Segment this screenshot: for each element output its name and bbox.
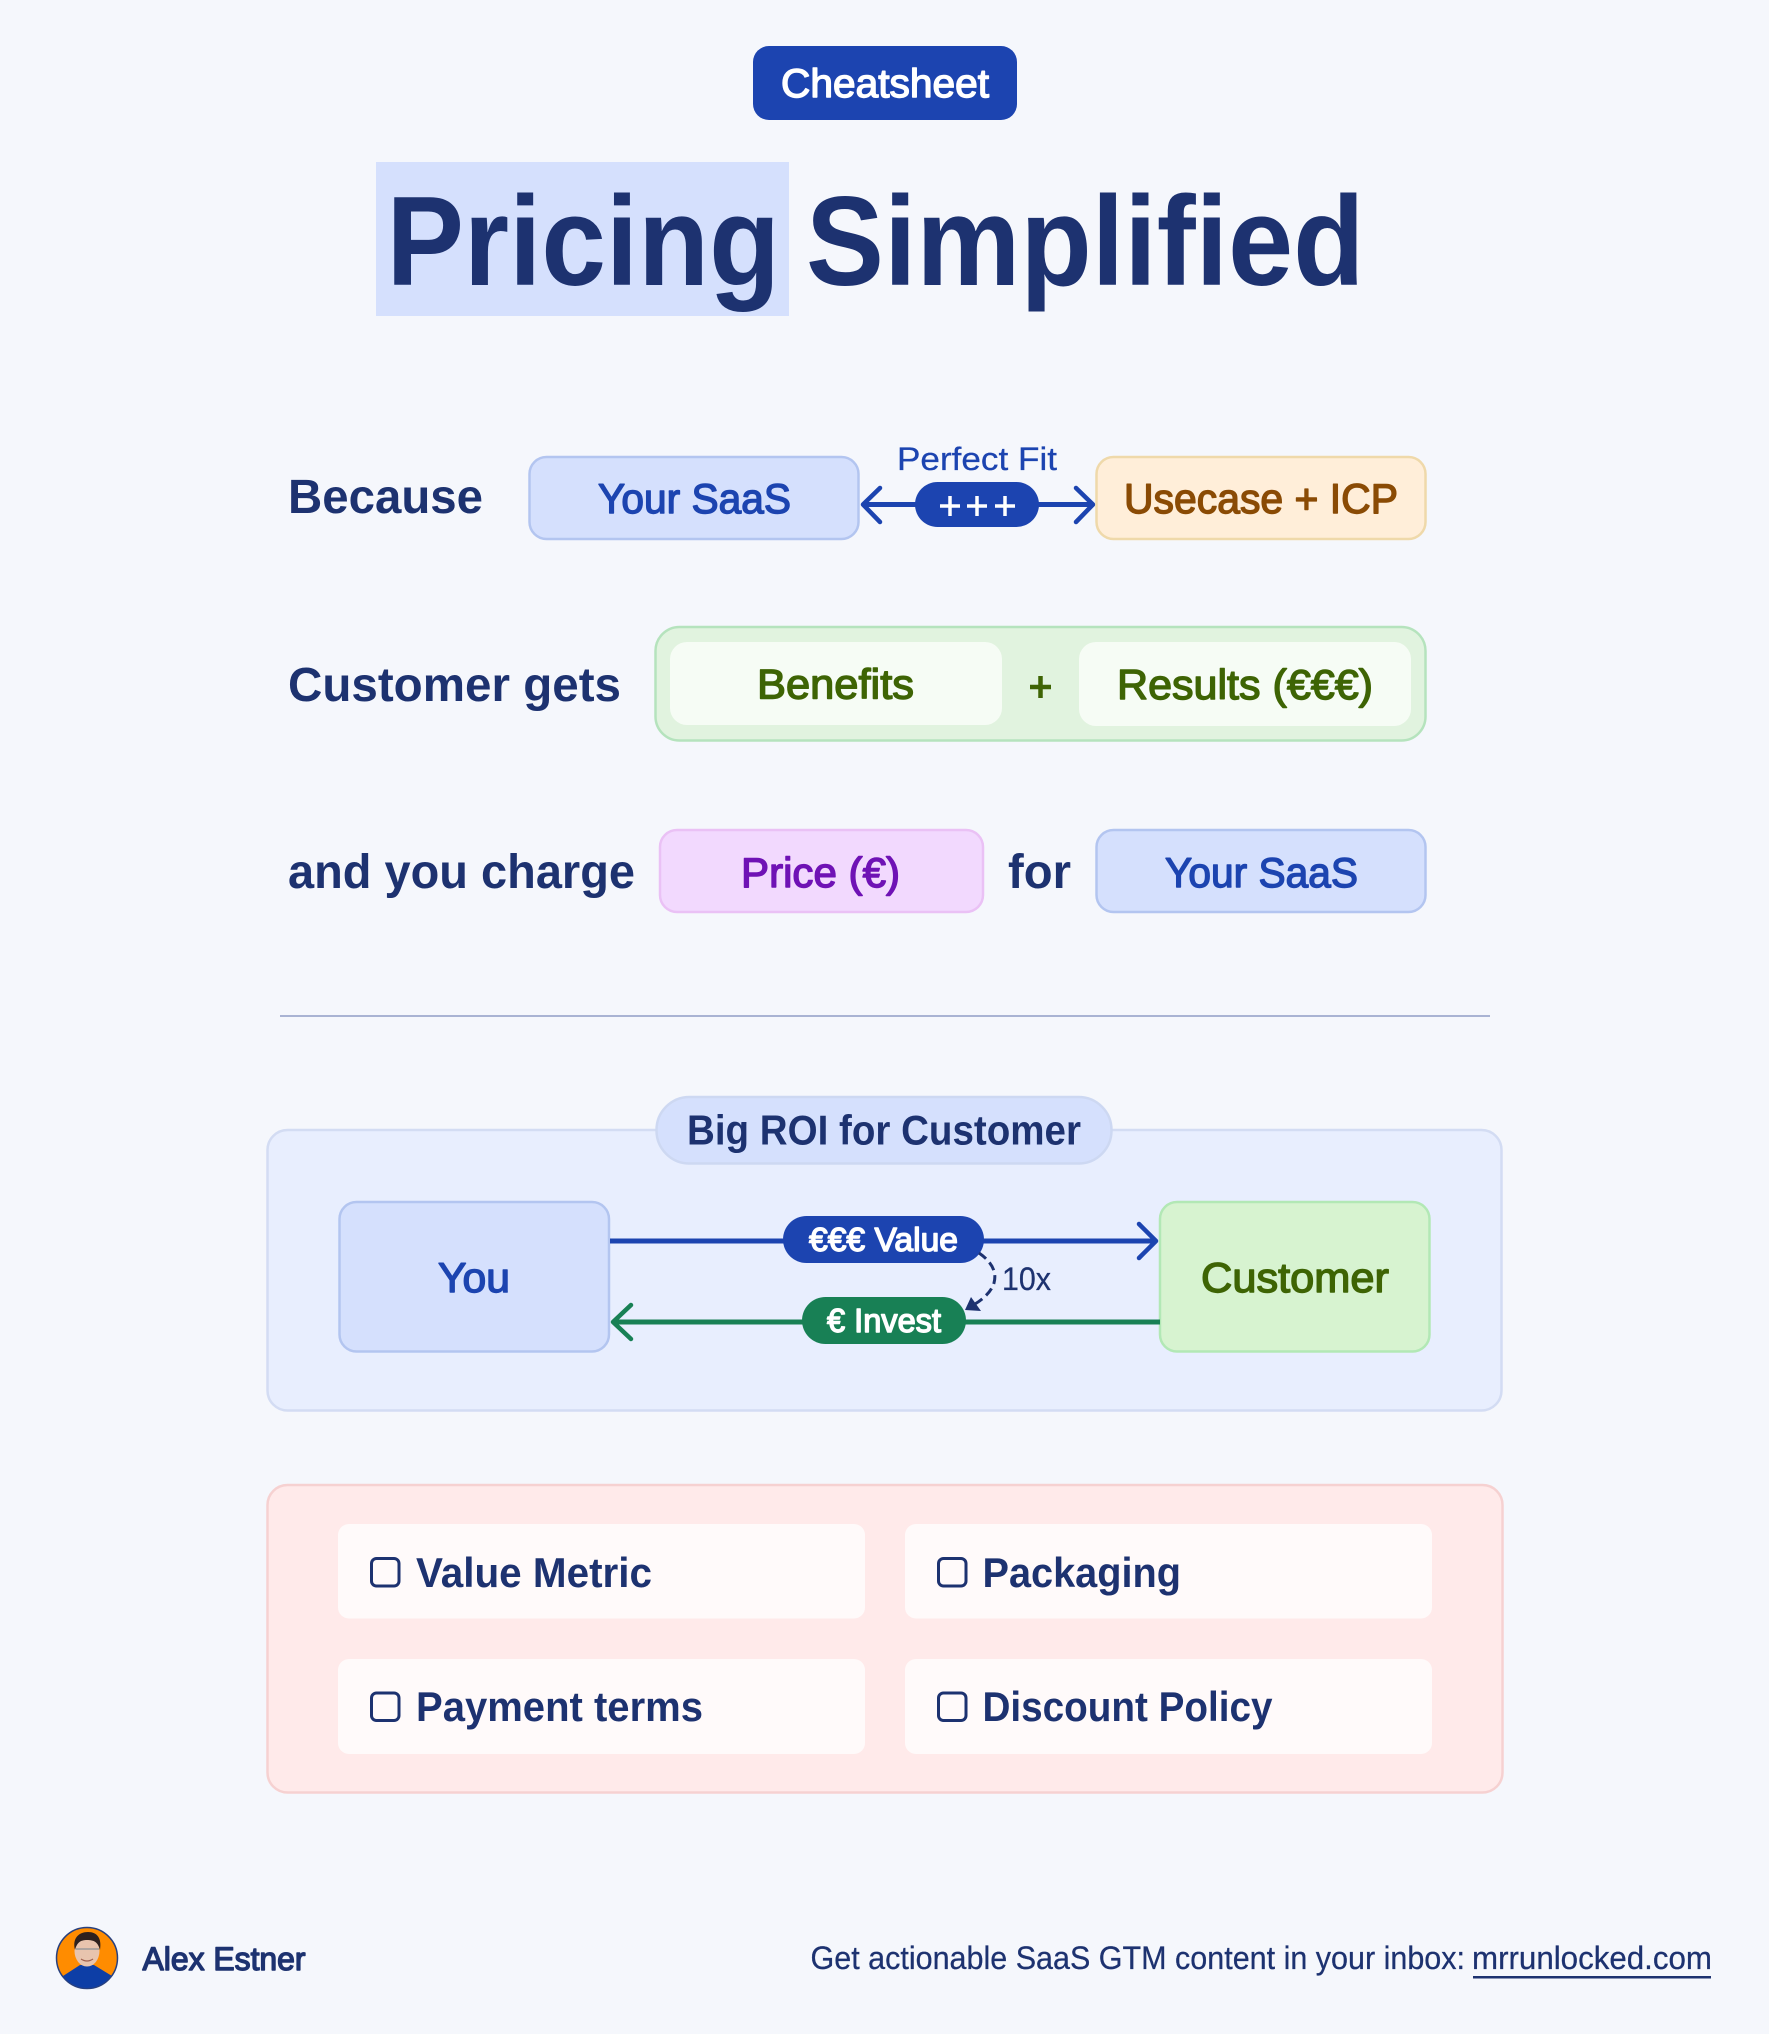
box: Your SaaS — [1096, 830, 1426, 912]
box: Price: Price (€) — [741, 849, 900, 896]
panel: checklist — [268, 1485, 1502, 1792]
item: Packaging: Packaging — [982, 1549, 1181, 1596]
panel: benefits and results: Results (€€€) — [1117, 661, 1373, 708]
arrow: value to customer — [610, 1216, 1156, 1263]
row: Customer gets — [288, 627, 1426, 740]
title: Pricing Simplified: Simplified — [806, 170, 1364, 312]
item: Value Metric: Value Metric — [416, 1549, 652, 1596]
box: Price — [660, 830, 983, 912]
item: Value Metric — [338, 1524, 865, 1618]
arrow: 10x dashed: 10x — [1002, 1261, 1051, 1297]
label: Because: Because — [288, 471, 483, 524]
box: You: You — [438, 1254, 510, 1301]
badge: Cheatsheet — [753, 46, 1017, 120]
box: Usecase + ICP — [1096, 457, 1426, 539]
title: Pricing Simplified — [376, 162, 1364, 316]
arrow: invest to you: € Invest — [827, 1302, 941, 1339]
icon: avatar — [56, 1928, 118, 1995]
footer: author — [56, 1928, 306, 1995]
title: Pricing Simplified: Pricing — [386, 170, 780, 312]
footer: call to action: Get actionable SaaS GTM content in your inbox: — [810, 1940, 1465, 1976]
panel: benefits and results: Benefits — [757, 660, 914, 708]
panel: benefits and results — [656, 627, 1426, 740]
item: Payment terms: Payment terms — [416, 1683, 703, 1730]
heading pill: Big ROI for Customer: Big ROI for Customer — [687, 1106, 1081, 1154]
arrow: value to customer: €€€ Value — [809, 1221, 958, 1258]
panel: Big ROI for Customer — [268, 1097, 1502, 1410]
arrow: Perfect Fit double arrow: Perfect Fit — [897, 441, 1057, 477]
footer: call to action: mrrunlocked.com — [1472, 1940, 1712, 1976]
box: Your SaaS: Your SaaS — [1165, 849, 1358, 896]
box: Customer: Customer — [1201, 1254, 1389, 1301]
arrow: 10x dashed — [965, 1253, 1051, 1311]
author name: Alex Estner — [142, 1941, 306, 1977]
row: Because — [288, 441, 1426, 539]
heading pill: Big ROI for Customer — [656, 1097, 1112, 1164]
box: Your SaaS — [530, 457, 858, 539]
box: Your SaaS: Your SaaS — [598, 475, 791, 522]
box: Usecase + ICP: Usecase + ICP — [1124, 475, 1398, 522]
box: Customer — [1160, 1202, 1430, 1352]
item: Discount Policy — [905, 1659, 1432, 1754]
badge: Cheatsheet: Cheatsheet — [781, 62, 989, 106]
item: Packaging — [905, 1524, 1432, 1618]
arrow: invest to you — [613, 1297, 1160, 1344]
box: You — [340, 1202, 609, 1352]
arrow: Perfect Fit double arrow — [863, 441, 1093, 527]
item: Payment terms — [338, 1659, 865, 1754]
label: Customer gets: Customer gets — [288, 659, 621, 712]
label: for: for — [1008, 846, 1071, 899]
label: and you charge: and you charge — [288, 846, 635, 899]
row: and you charge — [288, 830, 1426, 912]
item: Discount Policy: Discount Policy — [982, 1683, 1273, 1730]
